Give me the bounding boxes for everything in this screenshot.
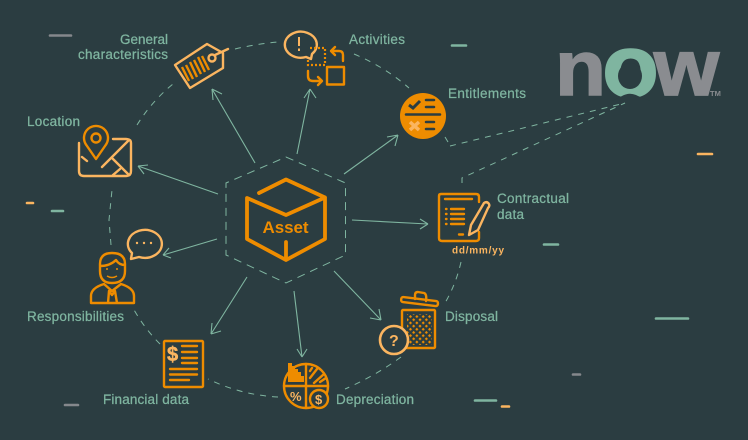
- label: contractual data: data: [497, 207, 524, 222]
- icon: activities: [285, 32, 344, 85]
- label: contractual data: Contractual: [497, 191, 569, 206]
- icon: depreciation chart: [284, 363, 328, 408]
- logo: now: o: [602, 18, 658, 115]
- icon: person: [91, 230, 162, 303]
- icon: depreciation chart: $: [315, 392, 323, 407]
- arrow: activities: [297, 89, 316, 154]
- arrow: financial: [211, 277, 247, 334]
- label: location: Location: [27, 114, 80, 129]
- icon: disposal bin: [380, 292, 438, 354]
- arrow: general characteristics: [212, 89, 255, 163]
- dashed hexagon: [226, 157, 346, 283]
- icon: location map: [79, 126, 131, 176]
- arrow: depreciation: [294, 291, 307, 357]
- arrow: disposal: [334, 271, 381, 320]
- date text: dd/mm/yy: [452, 246, 504, 256]
- arrows from asset: [138, 89, 428, 357]
- asset label: Asset: [262, 218, 309, 237]
- label: responsibilities: Responsibilities: [27, 309, 124, 324]
- icon: asset box: [247, 180, 325, 260]
- label: general characteristics: [78, 32, 168, 62]
- icon: contract document: [439, 194, 504, 256]
- label: disposal: Disposal: [445, 309, 498, 324]
- label: contractual data: [497, 191, 569, 222]
- arrow: contractual: [352, 219, 428, 229]
- label: activities: Activities: [349, 32, 405, 47]
- arrow: location: [138, 165, 218, 194]
- icon: disposal bin: ?: [389, 333, 399, 350]
- label: general characteristics: General: [120, 32, 168, 47]
- dashed links to logo: [450, 103, 625, 183]
- logo: now: w: [653, 23, 720, 112]
- logo: now: [555, 18, 721, 115]
- arrow: entitlements: [344, 135, 398, 174]
- icon: entitlements: [400, 93, 446, 139]
- arrow: responsibilities: [163, 239, 217, 258]
- labels: [27, 32, 569, 407]
- speech bubble: [128, 230, 162, 259]
- label: entitlements: Entitlements: [448, 86, 526, 101]
- label: depreciation: Depreciation: [336, 392, 414, 407]
- icon: depreciation chart: %: [290, 389, 302, 404]
- dashed ring connecting the icons: [109, 42, 461, 397]
- label: financial data: Financial data: [103, 392, 189, 407]
- icon: financial document: [164, 341, 203, 387]
- logo: now: n: [555, 24, 606, 112]
- icon: price tag: [175, 44, 228, 88]
- icon: financial document: $: [167, 344, 178, 366]
- logo: now: TM: [710, 89, 721, 98]
- label: general characteristics: characteristics: [78, 47, 168, 62]
